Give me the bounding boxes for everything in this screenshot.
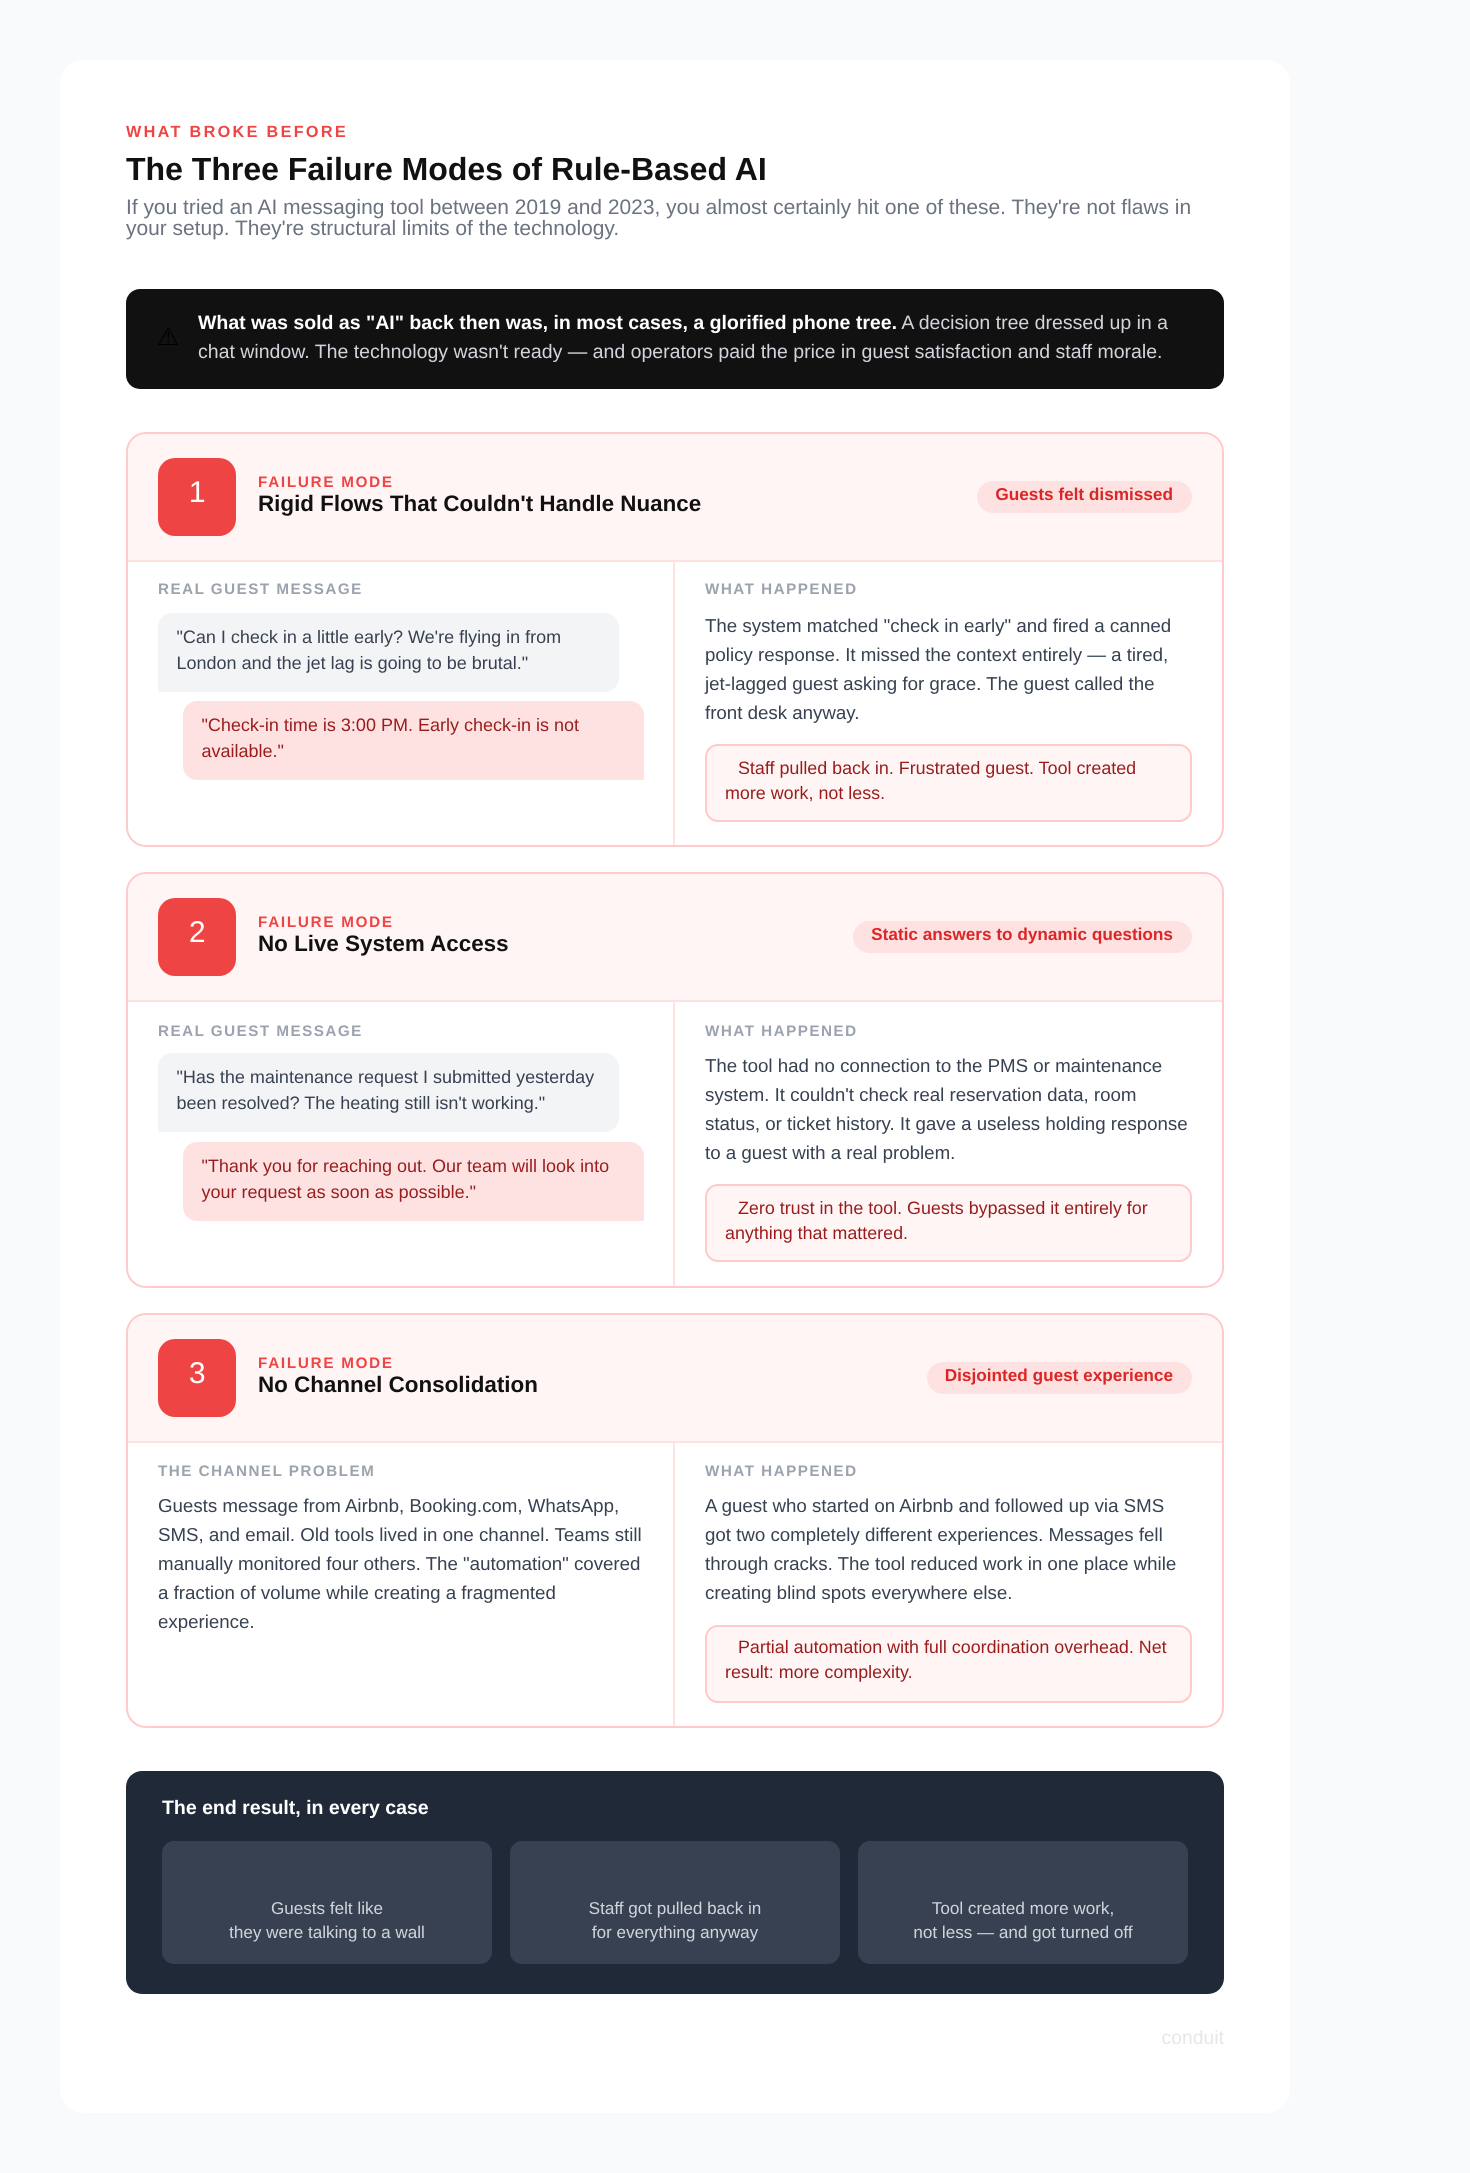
guest message bubble: been resolved? The heating still isn't working." xyxy=(176,1093,545,1113)
result box: Staff pulled back in. Frustrated guest. Tool created xyxy=(738,758,1136,778)
tile: staff xyxy=(510,1841,840,1964)
panel: failure mode 3 xyxy=(126,1313,1224,1728)
tile: guests: Guests felt like xyxy=(271,1899,383,1918)
explanation text: The tool had no connection to the PMS or maintenance xyxy=(705,1055,1162,1076)
result box: result: more complexity. xyxy=(725,1662,913,1682)
bot reply bubble: available." xyxy=(202,741,284,761)
explanation text xyxy=(705,1495,1176,1603)
explanation text: to a guest with a real problem. xyxy=(705,1142,955,1163)
right column label: WHAT HAPPENED xyxy=(705,581,858,598)
number badge xyxy=(158,898,236,976)
card header xyxy=(128,434,1222,562)
bot reply bubble: "Check-in time is 3:00 PM. Early check-in is not xyxy=(202,715,579,735)
number badge: 1 xyxy=(189,476,206,509)
outcome pill: Static answers to dynamic questions xyxy=(871,924,1173,944)
tile: guests xyxy=(162,1841,492,1964)
guest message bubble xyxy=(158,613,619,692)
outcome pill xyxy=(977,481,1192,513)
icon: warning: ⚠ xyxy=(157,322,179,351)
result box xyxy=(705,744,1192,822)
explanation text: jet-lagged guest asking for grace. The guest called the xyxy=(705,672,1154,694)
kicker: FAILURE MODE xyxy=(258,914,394,930)
eyebrow label: WHAT BROKE BEFORE xyxy=(126,123,348,141)
title: The Three Failure Modes of Rule-Based AI xyxy=(126,151,767,187)
result box: Partial automation with full coordination overhead. Net xyxy=(738,1637,1167,1657)
result box: Zero trust in the tool. Guests bypassed it entirely for xyxy=(738,1198,1148,1218)
panel heading: The end result, in every case xyxy=(162,1797,429,1819)
kicker: FAILURE MODE xyxy=(258,474,394,490)
outcome pill xyxy=(927,1362,1192,1394)
explanation text xyxy=(705,1055,1188,1163)
number badge xyxy=(158,458,236,536)
callout: glorified phone tree xyxy=(126,289,1224,389)
left column label: REAL GUEST MESSAGE xyxy=(158,1023,363,1040)
explanation text xyxy=(704,614,1171,723)
explanation text: A guest who started on Airbnb and followed up via SMS xyxy=(705,1495,1164,1516)
bot reply bubble xyxy=(183,701,644,780)
explanation text: system. It couldn't check real reservation data, room xyxy=(705,1084,1136,1105)
left column label: THE CHANNEL PROBLEM xyxy=(158,1463,375,1480)
card header xyxy=(128,1315,1222,1443)
bot reply bubble: your request as soon as possible." xyxy=(202,1182,476,1202)
outcome pill xyxy=(853,921,1192,953)
left column label: REAL GUEST MESSAGE xyxy=(158,581,363,598)
card title: Rigid Flows That Couldn't Handle Nuance xyxy=(258,491,701,516)
guest message bubble: "Has the maintenance request I submitted yesterday xyxy=(176,1067,594,1087)
outcome pill: Disjointed guest experience xyxy=(945,1365,1173,1385)
tile: tool xyxy=(858,1841,1188,1964)
panel: failure mode 1 xyxy=(126,432,1224,847)
tile: tool: Tool created more work, xyxy=(932,1899,1114,1918)
callout text: chat window. The technology wasn't ready — and operators paid the price in guest satisfaction and staff morale. xyxy=(198,341,1162,363)
channel problem text: experience. xyxy=(158,1611,255,1632)
explanation text: front desk anyway. xyxy=(705,702,859,722)
kicker: FAILURE MODE xyxy=(258,1354,394,1372)
number badge: 3 xyxy=(189,1357,206,1390)
result box: more work, not less. xyxy=(725,783,885,803)
bot reply bubble: "Thank you for reaching out. Our team will look into xyxy=(202,1156,609,1176)
channel problem text: SMS, and email. Old tools lived in one channel. Teams still xyxy=(158,1524,642,1545)
white page panel xyxy=(60,60,1290,2113)
right column label: WHAT HAPPENED xyxy=(705,1023,858,1040)
explanation text: policy response. It missed the context entirely — a tired, xyxy=(705,644,1168,664)
result box: anything that mattered. xyxy=(725,1223,908,1243)
guest message bubble xyxy=(158,1053,619,1132)
tile: guests: they were talking to a wall xyxy=(229,1923,425,1942)
explanation text: status, or ticket history. It gave a useless holding response xyxy=(705,1113,1188,1134)
channel problem text: Guests message from Airbnb, Booking.com, WhatsApp, xyxy=(158,1495,619,1516)
right column label: WHAT HAPPENED xyxy=(705,1463,858,1480)
guest message bubble: "Can I check in a little early? We're flying in from xyxy=(176,627,561,647)
subtitle: your setup. They're structural limits of the technology. xyxy=(126,217,619,240)
guest message bubble: London and the jet lag is going to be brutal." xyxy=(176,653,528,673)
tile: tool: not less — and got turned off xyxy=(913,1923,1133,1942)
callout text: What was sold as "AI" back then was, in most cases, a glorified phone tree. A decision tree dressed up in a xyxy=(198,312,1168,334)
card title: No Channel Consolidation xyxy=(258,1372,538,1397)
tile: staff: for everything anyway xyxy=(592,1923,758,1942)
brand mark: conduit xyxy=(1161,2026,1224,2048)
channel problem text: manually monitored four others. The "automation" covered xyxy=(158,1553,640,1574)
channel problem text xyxy=(158,1495,642,1632)
callout text xyxy=(198,312,1168,363)
subtitle: If you tried an AI messaging tool between 2019 and 2023, you almost certainly hit one of these. They're not flaws in xyxy=(126,196,1191,219)
bot reply bubble xyxy=(183,1142,644,1221)
tile: staff: Staff got pulled back in xyxy=(589,1899,761,1918)
result box xyxy=(705,1184,1192,1262)
number badge: 2 xyxy=(189,916,206,949)
result box xyxy=(705,1625,1192,1703)
explanation text: creating blind spots everywhere else. xyxy=(705,1582,1012,1603)
channel problem text: a fraction of volume while creating a fragmented xyxy=(158,1582,556,1603)
number badge xyxy=(158,1339,236,1417)
subtitle xyxy=(126,196,1191,240)
explanation text: through cracks. The tool reduced work in one place while xyxy=(705,1553,1176,1574)
card title: No Live System Access xyxy=(258,931,509,956)
explanation text: got two completely different experiences. Messages fell xyxy=(705,1524,1163,1545)
panel: failure mode 2 xyxy=(126,872,1224,1288)
outcome pill: Guests felt dismissed xyxy=(995,484,1173,504)
panel: end result xyxy=(126,1771,1224,1994)
explanation text: The system matched "check in early" and fired a canned xyxy=(705,614,1171,636)
card header xyxy=(128,874,1222,1002)
